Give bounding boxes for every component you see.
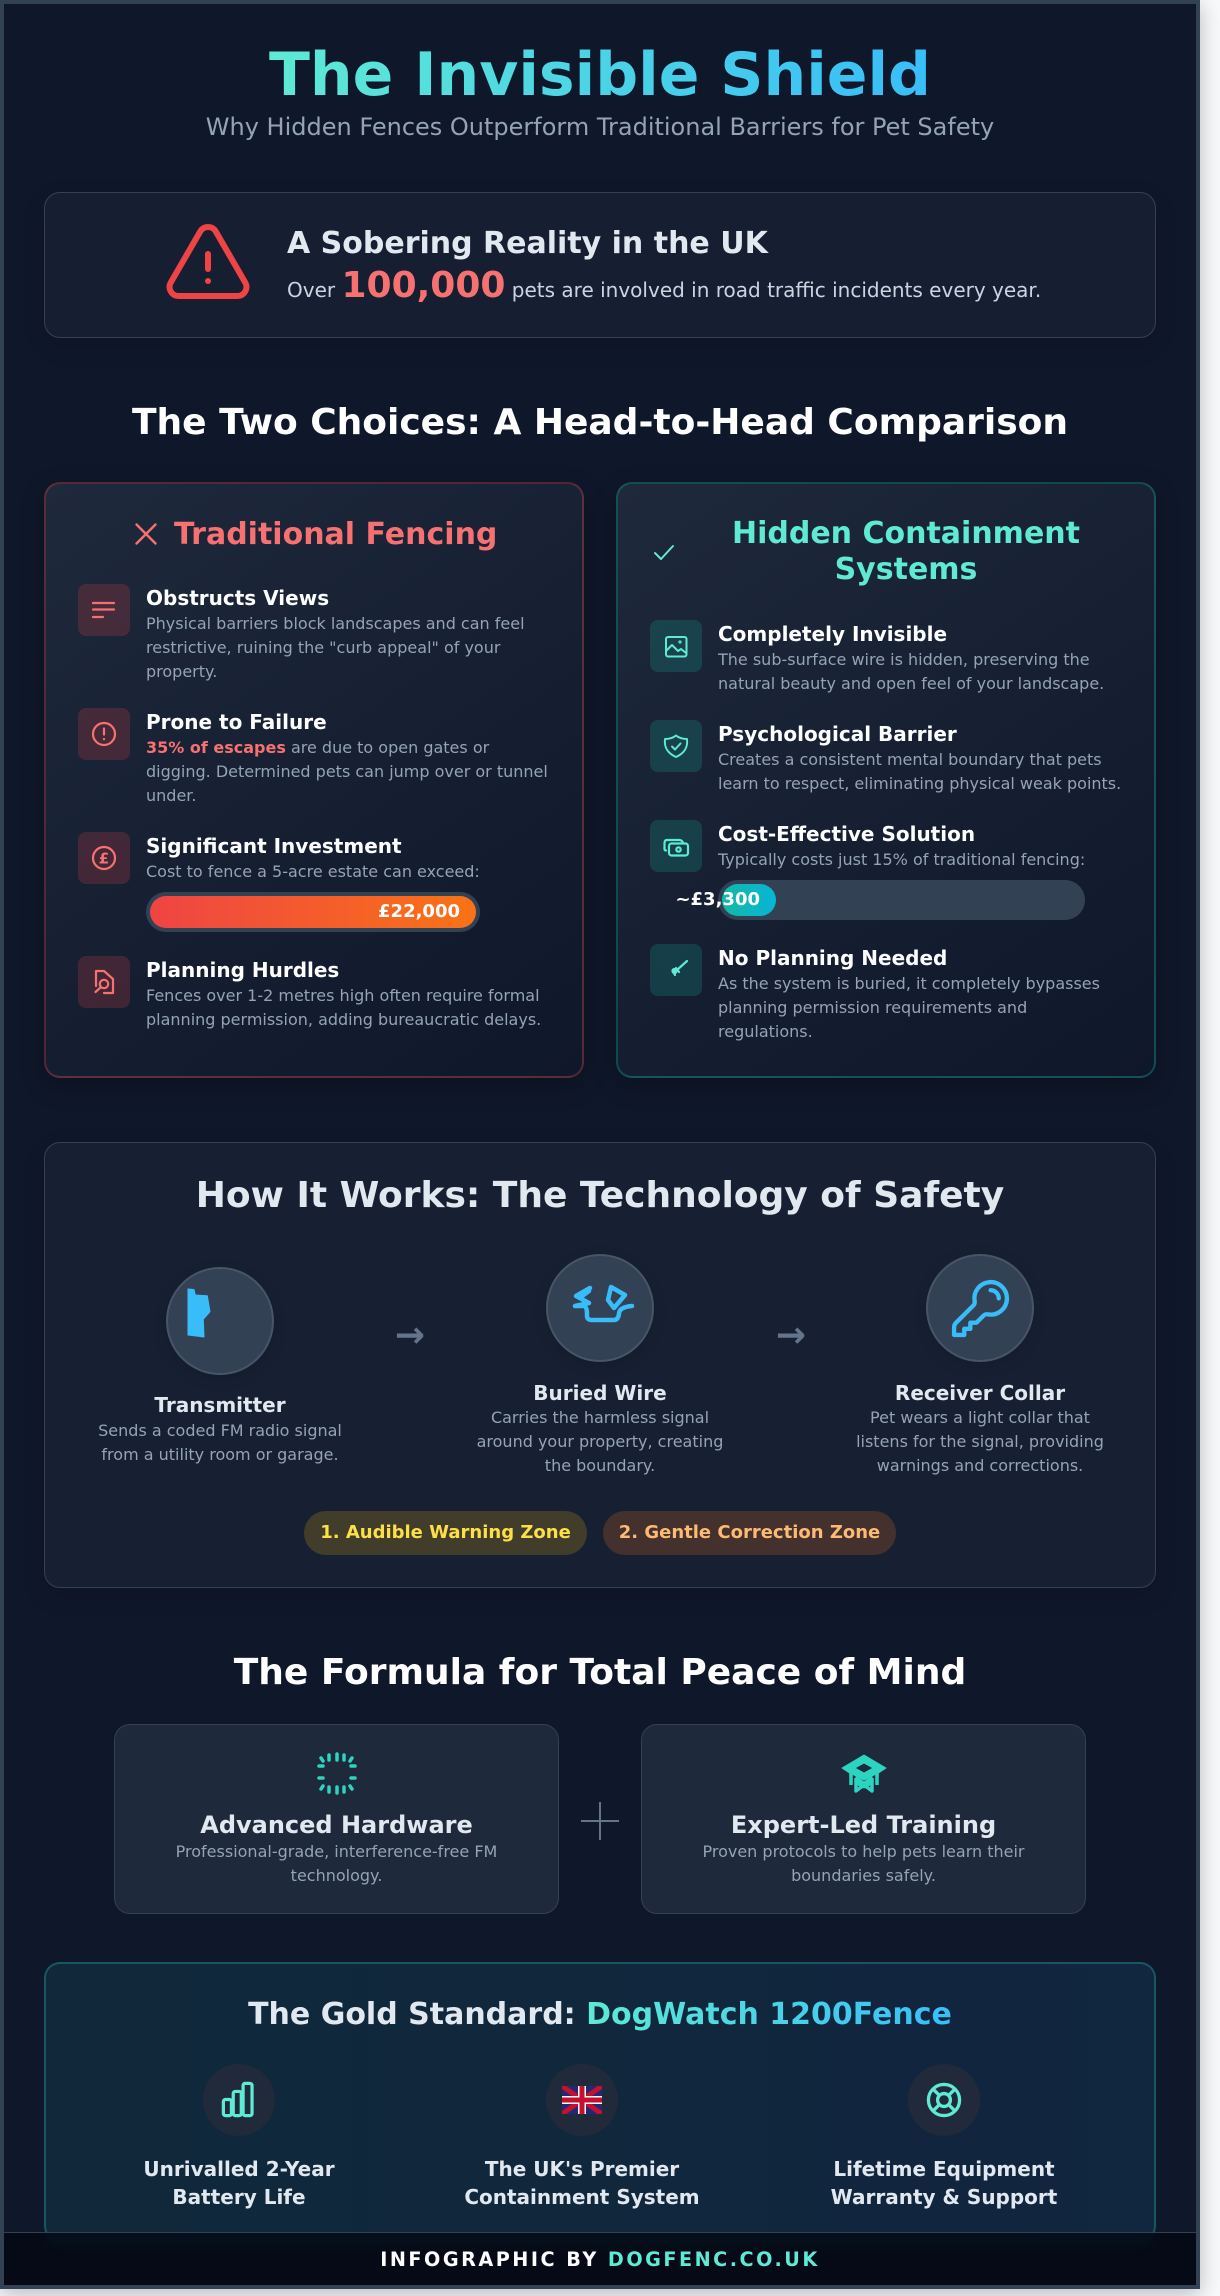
arrow: step one to two: → — [395, 1315, 425, 1356]
card text: expert-led training: Proven protocols to help pets learn their — [702, 1842, 1025, 1861]
description: receiver collar — [856, 1408, 1104, 1475]
text: significant investment: Cost to fence a 5-acre estate can exceed: — [146, 862, 480, 881]
how it works heading: How It Works: The Technology of Safety — [196, 1175, 1004, 1216]
card text: expert-led training: boundaries safely. — [791, 1866, 936, 1885]
text: no planning needed: regulations. — [718, 1022, 813, 1041]
icon: banknotes — [650, 820, 702, 872]
item: cost-effective solution: ~£3,300 — [675, 889, 760, 910]
alert heading: A Sobering Reality in the UK — [287, 226, 768, 261]
feature text: battery life: Battery Life — [172, 2185, 306, 2209]
text: prone to failure: 35% of escapes are due to open gates or — [146, 738, 489, 757]
text: cost-effective solution — [718, 822, 1085, 869]
text: prone to failure — [146, 710, 548, 805]
heading: two choices: The Two Choices: A Head-to-Head Comparison — [132, 402, 1068, 443]
card text: advanced hardware: technology. — [291, 1866, 382, 1885]
pill: gentle correction zone — [603, 1511, 896, 1555]
text: cost-effective solution: Cost-Effective Solution — [718, 822, 975, 846]
text: prone to failure: digging. Determined pets can jump over or tunnel — [146, 762, 548, 781]
text: no planning needed: As the system is buried, it completely bypasses — [718, 974, 1100, 993]
description: buried wire — [477, 1408, 723, 1475]
card text: expert-led training — [702, 1842, 1025, 1885]
feature text: battery life — [143, 2157, 335, 2209]
footer: INFOGRAPHIC BY DOGFENC.CO.UK — [380, 2248, 820, 2271]
panel: traditional fencing — [44, 482, 584, 1078]
icon: warning triangle — [166, 224, 250, 299]
text: significant investment: Significant Investment — [146, 834, 402, 858]
item: significant investment — [78, 832, 480, 932]
pill: audible warning zone — [304, 1511, 587, 1555]
text: completely invisible: natural beauty and open feel of your landscape. — [718, 674, 1104, 693]
gold standard heading: The Gold Standard: — [248, 1997, 576, 2032]
item: prone to failure — [78, 708, 548, 805]
description: transmitter: Sends a coded FM radio signal — [98, 1421, 342, 1440]
title: The Invisible Shield — [269, 40, 931, 110]
pill: audible warning zone: 1. Audible Warning Zone — [320, 1522, 571, 1543]
text: planning hurdles: Fences over 1-2 metres high often require formal — [146, 986, 540, 1005]
description: buried wire: the boundary. — [545, 1456, 655, 1475]
feature: premier system — [464, 2064, 700, 2209]
item: completely invisible — [650, 620, 1104, 693]
icon: shield check — [650, 720, 702, 772]
step: buried wire — [477, 1254, 723, 1475]
alert statistic: Over 100,000 pets are involved in road traffic incidents every year. — [287, 265, 1041, 306]
icon: tool — [650, 944, 702, 996]
card title: advanced hardware: Advanced Hardware — [200, 1811, 473, 1839]
cost bar: hidden — [718, 880, 1085, 920]
item: psychological barrier — [650, 720, 1121, 793]
description: receiver collar: Pet wears a light collar that — [870, 1408, 1090, 1427]
text: psychological barrier — [718, 722, 1121, 793]
gold standard heading: DogWatch 1200Fence — [586, 1997, 952, 2032]
footer — [4, 2232, 1196, 2285]
text: completely invisible: Completely Invisible — [718, 622, 947, 646]
gold standard heading — [248, 1997, 952, 2032]
card: advanced hardware — [114, 1724, 559, 1914]
feature text: warranty — [831, 2157, 1057, 2209]
cost bar: traditional — [146, 892, 480, 932]
icon: transmitter — [166, 1267, 274, 1375]
card: expert-led training — [641, 1724, 1086, 1914]
icon: cross — [135, 523, 157, 545]
panel: hidden containment — [616, 482, 1156, 1078]
text: no planning needed: planning permission requirements and — [718, 998, 1027, 1017]
hidden containment heading: Systems — [835, 552, 977, 587]
text: prone to failure: Prone to Failure — [146, 710, 327, 734]
icon: lifebuoy — [908, 2064, 980, 2136]
text: obstructs views: Obstructs Views — [146, 586, 329, 610]
item: obstructs views — [78, 584, 525, 681]
text: planning hurdles: planning permission, adding bureaucratic delays. — [146, 1010, 541, 1029]
item: planning hurdles — [78, 956, 541, 1029]
cost bar: traditional: £22,000 — [378, 901, 460, 922]
text: planning hurdles — [146, 958, 541, 1029]
feature text: premier system — [464, 2157, 700, 2209]
icon: bar chart — [203, 2064, 275, 2136]
description: receiver collar: listens for the signal, providing — [856, 1432, 1104, 1451]
feature text: warranty: Warranty & Support — [831, 2185, 1057, 2209]
icon: exclamation circle — [78, 708, 130, 760]
panel: gold standard — [44, 1962, 1156, 2242]
traditional fencing heading: Traditional Fencing — [174, 517, 497, 552]
step: transmitter — [98, 1267, 342, 1464]
icon: document search — [78, 956, 130, 1008]
text: psychological barrier: Psychological Barrier — [718, 722, 957, 746]
text: no planning needed — [718, 946, 1100, 1041]
hidden containment heading — [732, 516, 1080, 587]
icon: key — [926, 1254, 1034, 1362]
icon: lines — [78, 584, 130, 636]
pill: gentle correction zone: 2. Gentle Correction Zone — [619, 1522, 880, 1543]
text: obstructs views: Physical barriers block landscapes and can feel — [146, 614, 525, 633]
heading: formula: The Formula for Total Peace of Mind — [234, 1652, 966, 1693]
feature: battery life — [143, 2064, 335, 2209]
icon: union flag — [546, 2064, 618, 2136]
text: obstructs views: restrictive, ruining the "curb appeal" of your — [146, 638, 500, 657]
icon: check — [654, 545, 674, 560]
icon: plus — [581, 1802, 619, 1840]
icon: wire — [546, 1254, 654, 1362]
card text: advanced hardware: Professional-grade, interference-free FM — [176, 1842, 497, 1861]
icon: pound circle: £ — [99, 850, 109, 868]
panel: how it works — [44, 1142, 1156, 1588]
panel: alert — [44, 192, 1156, 338]
feature text: premier system: The UK's Premier — [485, 2157, 679, 2181]
text: obstructs views — [146, 586, 525, 681]
description: transmitter — [98, 1421, 342, 1464]
description: transmitter: from a utility room or garage. — [101, 1445, 339, 1464]
description: receiver collar: warnings and corrections. — [877, 1456, 1083, 1475]
step: receiver collar — [856, 1254, 1104, 1475]
icon: training cap — [842, 1754, 886, 1793]
item: cost-effective solution — [650, 820, 1085, 920]
card title: expert-led training: Expert-Led Training — [731, 1811, 996, 1839]
label: receiver collar: Receiver Collar — [895, 1381, 1065, 1405]
icon: photo — [650, 620, 702, 672]
icon: chip dashes — [317, 1752, 357, 1795]
arrow: step two to three: → — [776, 1315, 806, 1356]
label: buried wire: Buried Wire — [533, 1381, 667, 1405]
label: transmitter: Transmitter — [154, 1393, 286, 1417]
feature: warranty — [831, 2064, 1057, 2209]
text: obstructs views: property. — [146, 662, 217, 681]
subtitle: Why Hidden Fences Outperform Traditional Barriers for Pet Safety — [206, 113, 994, 141]
description: buried wire: around your property, creating — [477, 1432, 723, 1451]
card text: advanced hardware — [176, 1842, 497, 1885]
text: prone to failure: under. — [146, 786, 196, 805]
text: psychological barrier: Creates a consistent mental boundary that pets — [718, 750, 1102, 769]
text: completely invisible — [718, 622, 1104, 693]
item: no planning needed — [650, 944, 1100, 1041]
feature text: premier system: Containment System — [464, 2185, 700, 2209]
icon: pound circle — [78, 832, 130, 884]
hidden containment heading: Hidden Containment — [732, 516, 1080, 551]
text: planning hurdles: Planning Hurdles — [146, 958, 339, 982]
text: cost-effective solution: Typically costs just 15% of traditional fencing: — [718, 850, 1085, 869]
description: buried wire: Carries the harmless signal — [491, 1408, 709, 1427]
text: completely invisible: The sub-surface wire is hidden, preserving the — [718, 650, 1090, 669]
feature text: warranty: Lifetime Equipment — [833, 2157, 1055, 2181]
text: psychological barrier: learn to respect, eliminating physical weak points. — [718, 774, 1121, 793]
text: no planning needed: No Planning Needed — [718, 946, 947, 970]
feature text: battery life: Unrivalled 2-Year — [143, 2157, 335, 2181]
text: significant investment — [146, 834, 480, 881]
